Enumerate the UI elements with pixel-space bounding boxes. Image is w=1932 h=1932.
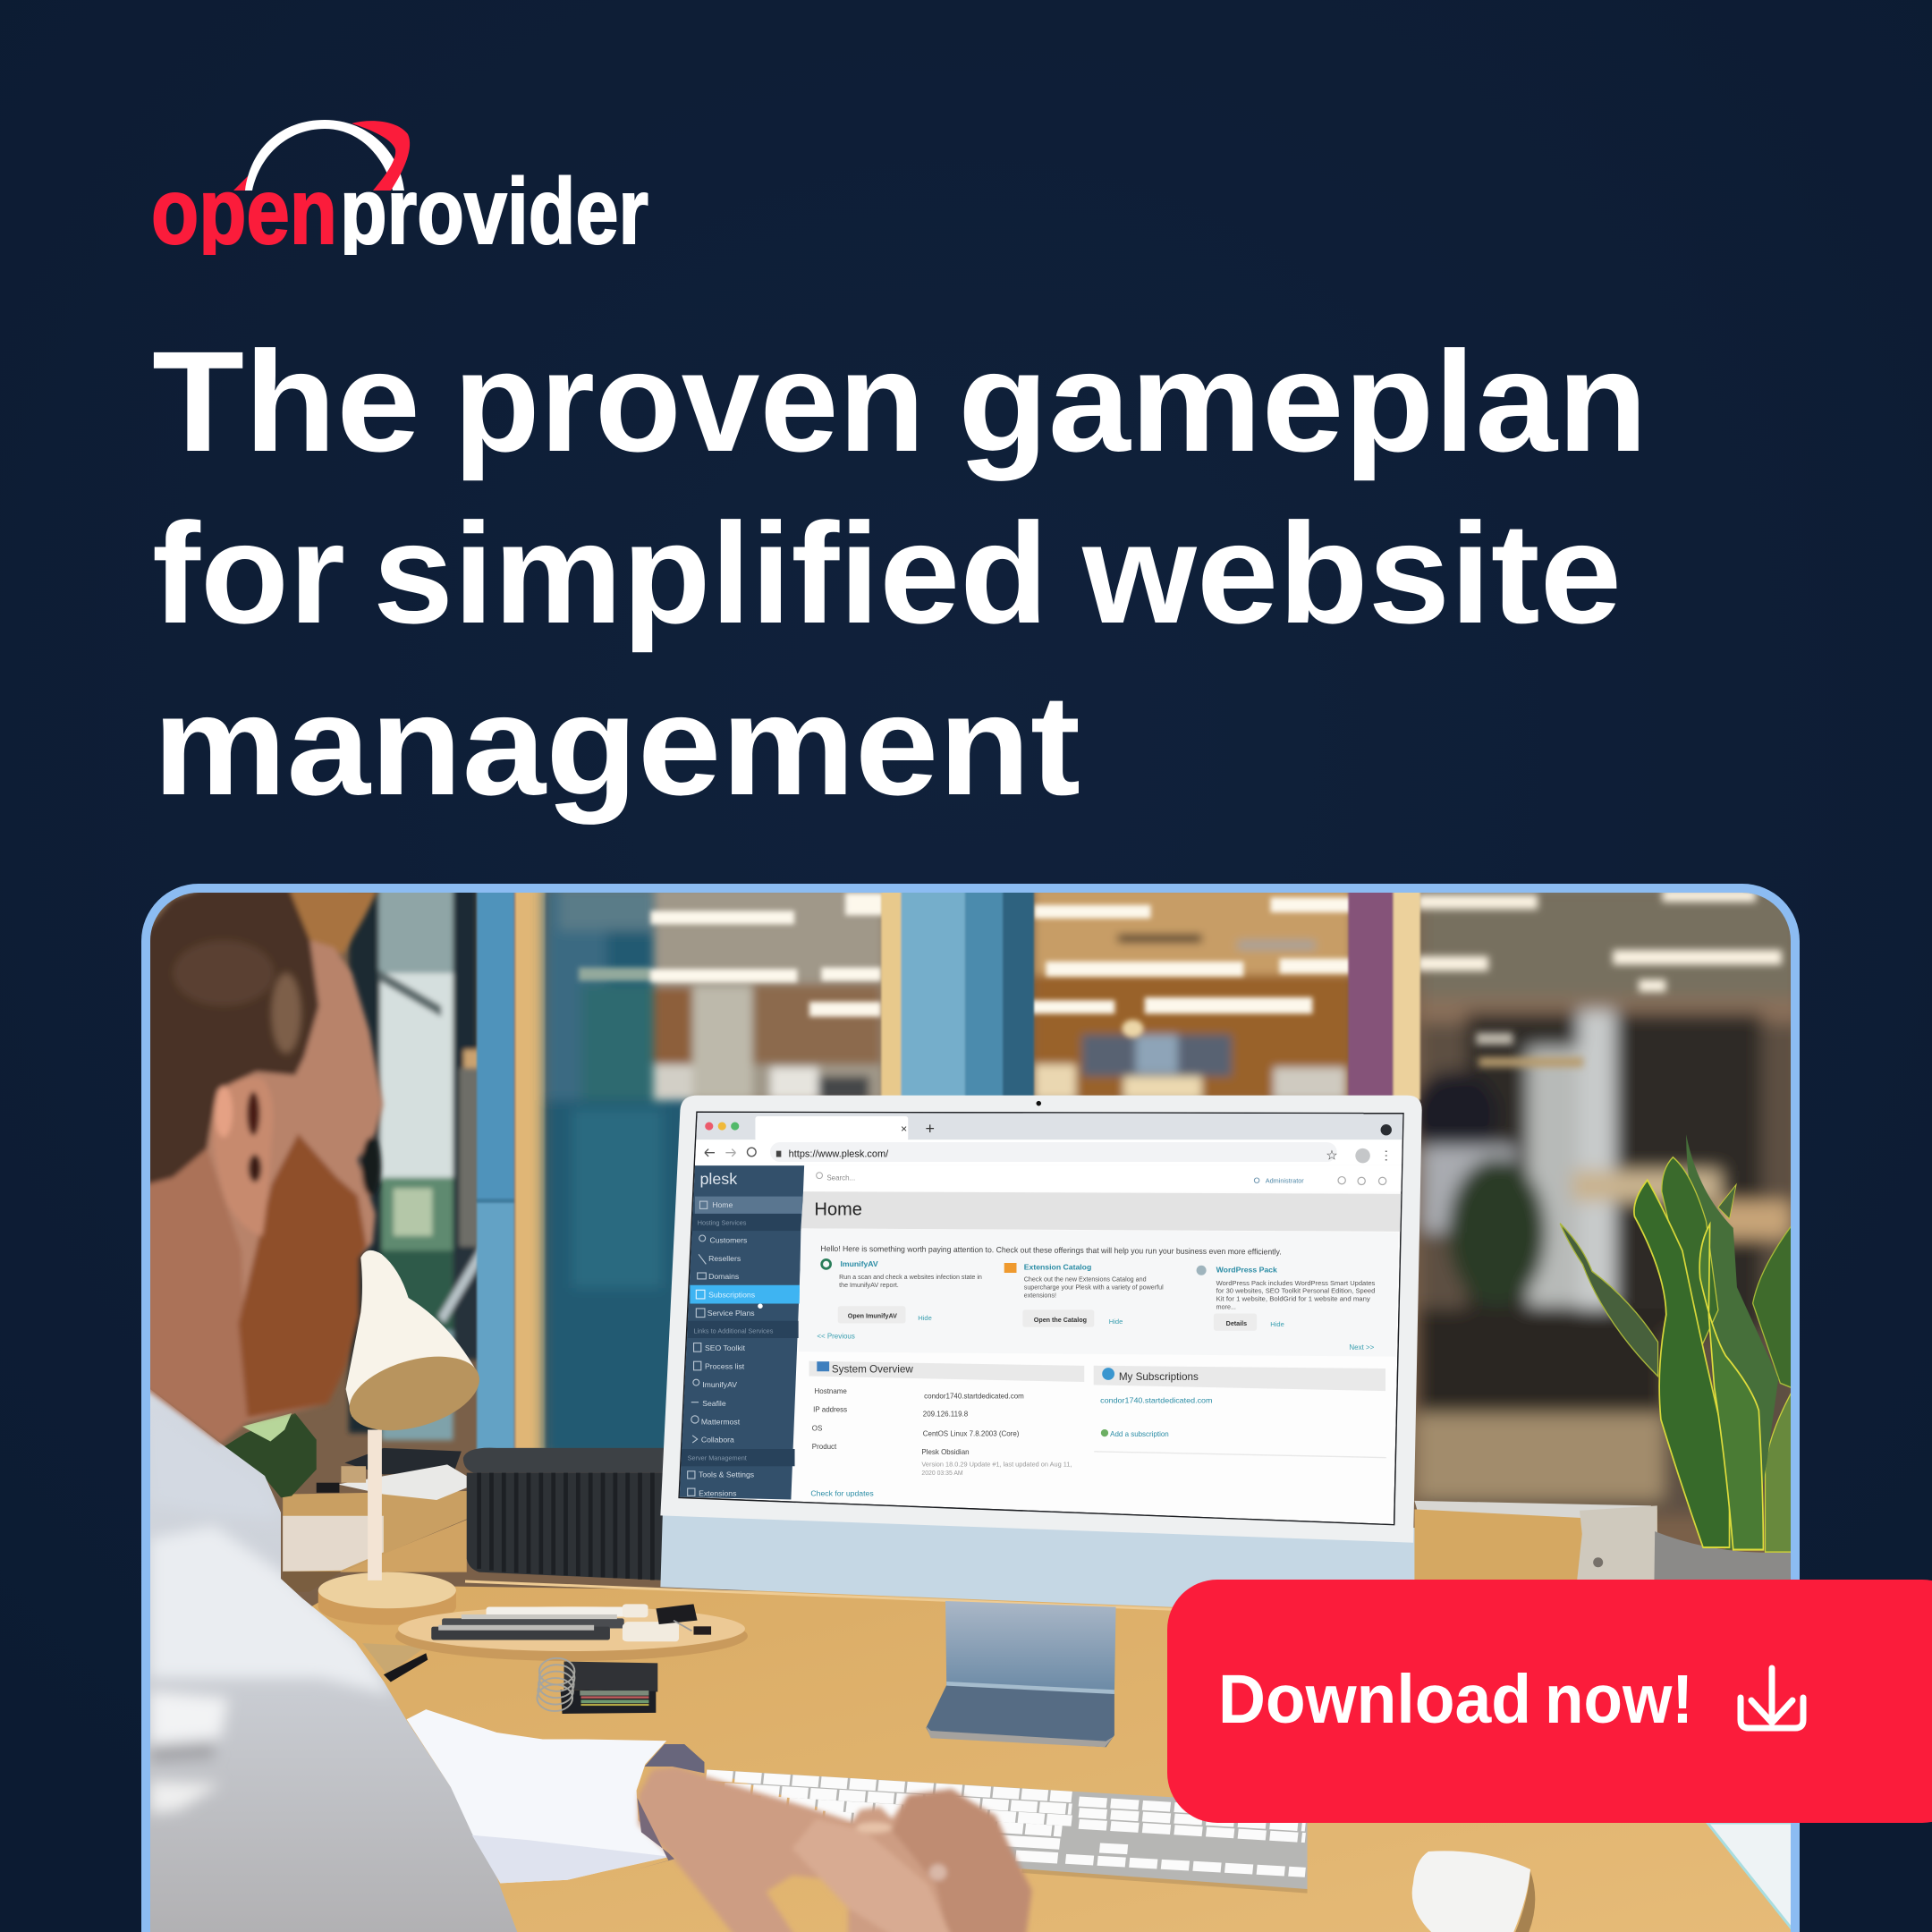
icon: download — [1741, 1668, 1803, 1728]
leaf: big front — [1634, 1180, 1730, 1547]
sidebar labels: SEO Toolkit — [705, 1343, 746, 1352]
offer: Extension Catalog: supercharge your Plesk with a variety of powerful — [1024, 1284, 1164, 1292]
lamp pole — [368, 1429, 382, 1580]
photo frame — [141, 884, 1800, 1932]
shirt light folds — [150, 1413, 391, 1814]
sidebar labels: Collabora — [701, 1435, 734, 1444]
monitor chin — [660, 1515, 1415, 1607]
headline line 2 — [152, 493, 1622, 653]
side desk — [283, 1491, 467, 1572]
offer: WordPress Pack: more... — [1216, 1304, 1236, 1311]
offer: WordPress Pack: WordPress Pack includes WordPress Smart Updates — [1216, 1280, 1376, 1287]
desk edge highlight — [465, 1581, 1190, 1610]
shirt body — [143, 1377, 537, 1932]
sidebar labels: Resellers — [708, 1254, 741, 1263]
sidebar labels: Subscriptions — [708, 1291, 756, 1300]
leaf: tall back — [1686, 1134, 1778, 1550]
system overview panel: OS — [812, 1424, 822, 1432]
ear highlight — [215, 1086, 233, 1138]
offer: WordPress Pack: for 30 websites, SEO Toolkit Personal Edition, Speed — [1216, 1288, 1375, 1295]
spiral notebook — [537, 1658, 657, 1714]
offers card: Next >> — [1349, 1343, 1375, 1352]
dark teal glass — [544, 886, 691, 1458]
my subscriptions panel: condor1740.startdedicated.com — [1100, 1396, 1213, 1404]
magic mouse — [1412, 1851, 1530, 1932]
headline line 1 — [152, 321, 1648, 481]
logo word provider: provider — [340, 160, 648, 264]
hair — [146, 889, 319, 1185]
plesk dashboard screenshot — [679, 1113, 1407, 1524]
plesk top search bar: Administrator — [1266, 1176, 1304, 1184]
ginger hair top — [284, 889, 378, 955]
home page heading band — [801, 1191, 1404, 1232]
desk white object lower right — [1707, 1823, 1798, 1932]
sidebar labels: Mattermost — [701, 1417, 741, 1426]
logo arc: white — [245, 120, 404, 191]
man at desk — [143, 889, 1032, 1932]
logo wordmark — [154, 175, 648, 255]
sidebar labels: Tools & Settings — [699, 1470, 755, 1479]
offer: ImunifyAV: Open ImunifyAV — [848, 1312, 897, 1319]
system overview panel: 2020 03:35 AM — [921, 1470, 963, 1477]
headline line 2: website — [1081, 493, 1622, 653]
offer: WordPress Pack: Details — [1226, 1320, 1247, 1327]
sidebar labels: ImunifyAV — [702, 1380, 737, 1389]
ceiling lights — [579, 893, 1354, 1038]
offer: ImunifyAV: Run a scan and check a websites infection state in — [839, 1274, 982, 1281]
headline line 1: proven — [453, 321, 925, 481]
logo: openprovider — [151, 120, 648, 264]
screen — [678, 1112, 1404, 1525]
hand — [639, 1767, 1032, 1932]
offer: WordPress Pack: Kit for 1 website, BoldGrid for 1 website and many — [1216, 1296, 1370, 1303]
hair highlights — [173, 940, 301, 1054]
eye shadow — [361, 1138, 381, 1196]
offer: ImunifyAV: the ImunifyAV report. — [839, 1282, 899, 1289]
offer: Extension Catalog: Extension Catalog — [1024, 1263, 1091, 1272]
monitor bezel — [660, 1096, 1422, 1543]
sidebar labels: Links to Additional Services — [694, 1327, 774, 1335]
head — [146, 889, 383, 1444]
leaf: left thin — [1560, 1224, 1658, 1377]
offer: WordPress Pack: WordPress Pack — [1216, 1265, 1277, 1274]
offer: ImunifyAV: ImunifyAV — [840, 1259, 878, 1268]
small silver box behind the monitor — [1414, 1501, 1657, 1602]
blurred office room on the right — [150, 893, 1791, 1606]
blue panel and wood column — [477, 886, 546, 1458]
logo arc: red left tip — [233, 174, 250, 191]
offers card — [799, 1228, 1399, 1357]
photo: man working at a monitor in an office — [136, 881, 1811, 1932]
browser tab bar: × — [901, 1123, 907, 1135]
system overview panel: Plesk Obsidian — [921, 1448, 970, 1456]
stacked books and papers — [344, 1448, 462, 1474]
keyboard — [707, 1769, 1308, 1894]
leaf: front yellow-edged — [1699, 1224, 1763, 1550]
button label: now! — [1545, 1661, 1693, 1738]
leaf: center — [1662, 1157, 1718, 1352]
plesk top search bar — [801, 1165, 1404, 1191]
logo arc: red swoosh — [352, 121, 410, 191]
system overview panel — [809, 1361, 1084, 1497]
ear — [213, 1078, 273, 1236]
system overview panel: IP address — [813, 1406, 847, 1414]
headline line 2: for — [152, 493, 345, 653]
offer: Extension Catalog: Open the Catalog — [1034, 1317, 1087, 1324]
offer: Extension Catalog: extensions! — [1024, 1292, 1056, 1300]
sidebar labels: Seafile — [702, 1399, 726, 1408]
system overview panel: Product — [812, 1443, 837, 1451]
call to action button — [1167, 1580, 1932, 1823]
face and neck — [146, 940, 383, 1444]
system overview panel: 209.126.119.8 — [923, 1410, 969, 1418]
offer: Extension Catalog — [1004, 1263, 1164, 1327]
shirt sleeve — [407, 1709, 670, 1883]
neck shadow — [146, 1148, 248, 1444]
offers intro text: Hello! Here is something worth paying attention to. Check out these offerings that will help you run your business even more efficiently. — [820, 1244, 1282, 1256]
leaf: small back tip — [1718, 1184, 1736, 1219]
sidebar labels: Hosting Services — [698, 1218, 747, 1226]
sidebar labels: Customers — [709, 1235, 748, 1244]
home page heading band: Home — [815, 1199, 862, 1219]
lamp shade — [344, 1250, 485, 1443]
offer: Extension Catalog: Hide — [1109, 1318, 1123, 1326]
offers pagination: << Previous — [817, 1333, 855, 1341]
small potted plant — [219, 1413, 317, 1497]
headline — [152, 321, 1648, 825]
sidebar labels: Process list — [705, 1361, 745, 1370]
lamp shade inside — [344, 1343, 485, 1443]
back desk and objects — [219, 1413, 665, 1682]
leaf: lower right — [1766, 1393, 1793, 1552]
system overview panel: CentOS Linux 7.8.2003 (Core) — [923, 1430, 1020, 1438]
system overview panel: Version 18.0.29 Update #1, last updated on Aug 11, — [921, 1462, 1072, 1468]
my subscriptions panel: Add a subscription — [1110, 1430, 1169, 1438]
browser address bar: ☆ — [1326, 1148, 1338, 1163]
ear inner — [247, 1092, 260, 1135]
browser address bar — [690, 1140, 1407, 1165]
shirt cuff — [637, 1744, 704, 1869]
cardboard folder — [363, 1643, 422, 1673]
monitor stand — [926, 1601, 1116, 1747]
sidebar section bands — [692, 1214, 801, 1231]
sidebar active item — [690, 1285, 800, 1303]
plant pot — [1654, 1531, 1793, 1589]
my subscriptions panel: My Subscriptions — [1119, 1371, 1199, 1383]
button label — [1218, 1661, 1693, 1738]
sidebar labels — [688, 1200, 774, 1497]
my subscriptions panel — [1094, 1366, 1386, 1458]
headline line 1: The — [152, 321, 420, 481]
dark basket — [467, 1473, 665, 1580]
camera — [1037, 1101, 1041, 1106]
beard — [239, 1133, 367, 1419]
monitor — [660, 1096, 1422, 1616]
system overview panel: Hostname — [815, 1387, 847, 1395]
button label: Download — [1218, 1661, 1531, 1738]
browser tab bar — [690, 1113, 1407, 1141]
office ceiling and columns above the monitor — [654, 886, 1352, 1100]
plesk top search bar: Search... — [826, 1174, 855, 1182]
mouse cursor — [758, 1303, 763, 1309]
sidebar labels: Service Plans — [708, 1309, 755, 1318]
logo word open: open — [151, 160, 337, 264]
system overview panel: Check for updates — [810, 1488, 874, 1497]
headline line 3: management — [153, 665, 1080, 825]
offer: ImunifyAV — [822, 1259, 982, 1323]
snake plant in pot — [1560, 1134, 1793, 1589]
office columns — [881, 886, 1420, 1100]
sidebar icons — [688, 1201, 708, 1496]
leaf: far right — [1753, 1225, 1792, 1387]
browser address bar: https://www.plesk.com/ — [789, 1149, 889, 1160]
sidebar labels: Extensions — [699, 1488, 737, 1497]
headline line 2: simplified — [373, 493, 1048, 653]
lamp base — [318, 1606, 456, 1624]
offer: WordPress Pack: Hide — [1270, 1320, 1284, 1328]
offer: Extension Catalog: Check out the new Extensions Catalog and — [1024, 1276, 1147, 1284]
sidebar labels: Home — [712, 1200, 733, 1209]
browser tab bar: + — [926, 1119, 935, 1137]
offer: WordPress Pack — [1197, 1265, 1376, 1331]
offer: ImunifyAV: Hide — [918, 1314, 932, 1322]
sidebar logo: plesk — [699, 1170, 737, 1188]
office window and blue column behind the man — [349, 886, 486, 1440]
mouse shadow — [1512, 1871, 1535, 1932]
system overview panel: System Overview — [832, 1364, 913, 1376]
headline line 1: gameplan — [958, 321, 1648, 481]
button background — [1167, 1580, 1932, 1823]
sidebar labels: Domains — [708, 1272, 740, 1281]
wooden tray with pens — [395, 1604, 748, 1661]
sidebar labels: Server Management — [688, 1453, 747, 1462]
main desk surface — [311, 1587, 1791, 1932]
system overview panel: condor1740.startdedicated.com — [924, 1393, 1024, 1401]
plesk sidebar — [679, 1165, 804, 1499]
sidebar home item — [695, 1197, 802, 1214]
